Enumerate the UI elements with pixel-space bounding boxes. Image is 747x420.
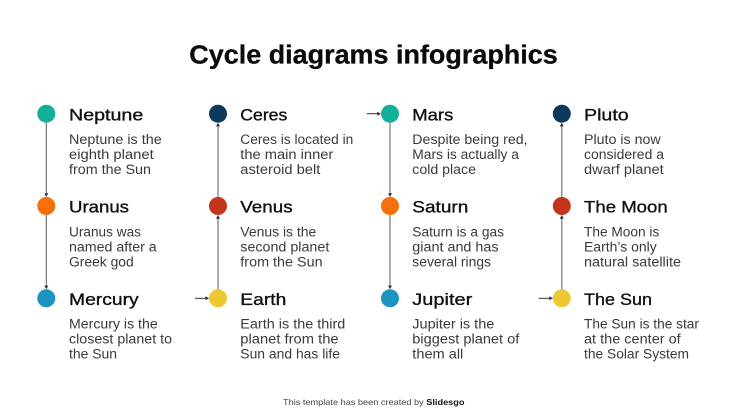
block: Neptune: from the Sun <box>69 162 151 177</box>
block: Saturn: Saturn is a gas <box>412 224 504 239</box>
arrow: The Moon to Pluto <box>560 123 564 198</box>
arrow: Mars to Saturn <box>388 122 392 197</box>
title: Cycle diagrams infographics <box>189 42 558 70</box>
block: Pluto: dwarf planet <box>584 162 664 177</box>
block: Ceres: Ceres is located in <box>240 132 353 147</box>
arrow: Neptune to Uranus <box>44 122 48 197</box>
block: The Sun: The Sun <box>584 290 652 309</box>
block: Pluto: Pluto is now <box>584 132 661 147</box>
column 1: Neptune to Mercury <box>37 105 172 362</box>
block: Jupiter: biggest planet of <box>412 332 520 347</box>
block: Uranus <box>69 198 157 269</box>
block: Uranus: Uranus <box>69 198 129 217</box>
icon: Neptune dot <box>37 105 55 123</box>
block: Mercury: Mercury is the <box>69 317 158 332</box>
arrow: Saturn to Jupiter <box>388 214 392 289</box>
block: Neptune: Neptune is the <box>69 132 162 147</box>
icon: Saturn dot <box>381 197 399 215</box>
column 4: The Sun to Pluto <box>539 105 700 362</box>
block: The Moon: natural satellite <box>584 254 681 269</box>
block: Earth <box>240 290 345 362</box>
block: Venus: from the Sun <box>240 254 323 269</box>
block: Jupiter: Jupiter <box>412 290 473 309</box>
block: Mercury <box>69 290 172 362</box>
block: Saturn: several rings <box>412 254 491 269</box>
block: The Moon: Earth’s only <box>584 239 657 254</box>
block: Venus: Venus is the <box>240 224 316 239</box>
arrow: into The Sun <box>539 296 553 300</box>
arrow: Earth to Venus <box>216 215 220 290</box>
block: Pluto: Pluto <box>584 105 629 124</box>
icon: Venus dot <box>209 197 227 215</box>
block: Uranus: named after a <box>69 239 157 254</box>
icon: Mercury dot <box>37 289 55 307</box>
block: The Sun: The Sun is the star <box>584 317 700 332</box>
block: Ceres: asteroid belt <box>240 162 321 177</box>
block: Ceres: Ceres <box>240 105 287 124</box>
icon: Uranus dot <box>37 197 55 215</box>
block: The Sun: at the center of <box>584 332 681 347</box>
block: Ceres <box>240 105 353 177</box>
icon: Jupiter dot <box>381 289 399 307</box>
block: Jupiter: them all <box>412 347 463 362</box>
block: Ceres: the main inner <box>240 147 334 162</box>
block: Mercury: Mercury <box>69 290 139 309</box>
column 2: Earth to Ceres <box>195 105 353 362</box>
block: Mars <box>412 105 528 177</box>
block: Mars: Despite being red, <box>412 132 528 147</box>
block: Mercury: the Sun <box>69 347 117 362</box>
block: Venus: second planet <box>240 239 330 254</box>
arrow: into Mars <box>367 112 381 116</box>
arrow: Uranus to Mercury <box>44 214 48 289</box>
block: Mars: Mars is actually a <box>412 147 519 162</box>
block: The Sun: the Solar System <box>584 347 689 362</box>
block: Neptune <box>69 105 162 177</box>
block: Uranus: Greek god <box>69 254 134 269</box>
block: Earth: Sun and has life <box>240 347 340 362</box>
block: Venus: Venus <box>240 198 293 217</box>
block: Mars: Mars <box>412 105 453 124</box>
block: Neptune: eighth planet <box>69 147 154 162</box>
block: Neptune: Neptune <box>69 105 143 124</box>
block: Jupiter <box>412 290 520 362</box>
icon: Ceres dot <box>209 105 227 123</box>
block: Saturn: giant and has <box>412 239 499 254</box>
icon: Earth dot <box>209 289 227 307</box>
footer credit: This template has been created by Slidesgo <box>283 397 465 407</box>
block: Earth: planet from the <box>240 332 339 347</box>
block: Saturn <box>412 198 504 269</box>
block: Earth: Earth is the third <box>240 317 345 332</box>
block: The Moon: The Moon <box>584 198 668 217</box>
block: Mercury: closest planet to <box>69 332 172 347</box>
block: The Sun <box>584 290 700 362</box>
block: Venus <box>240 198 330 269</box>
block: The Moon: The Moon is <box>584 224 660 239</box>
block: Mars: cold place <box>412 162 476 177</box>
icon: Mars dot <box>381 105 399 123</box>
block: Earth: Earth <box>240 290 286 309</box>
block: Saturn: Saturn <box>412 198 468 217</box>
column 3: Mars to Jupiter <box>367 105 528 362</box>
arrow: Venus to Ceres <box>216 123 220 198</box>
block: The Moon <box>584 198 681 269</box>
arrow: into Earth <box>195 296 209 300</box>
arrow: The Sun to The Moon <box>560 215 564 290</box>
block: Pluto <box>584 105 664 177</box>
block: Jupiter: Jupiter is the <box>412 317 494 332</box>
icon: Pluto dot <box>553 105 571 123</box>
icon: The Moon dot <box>553 197 571 215</box>
icon: The Sun dot <box>553 289 571 307</box>
block: Uranus: Uranus was <box>69 224 141 239</box>
block: Pluto: considered a <box>584 147 664 162</box>
